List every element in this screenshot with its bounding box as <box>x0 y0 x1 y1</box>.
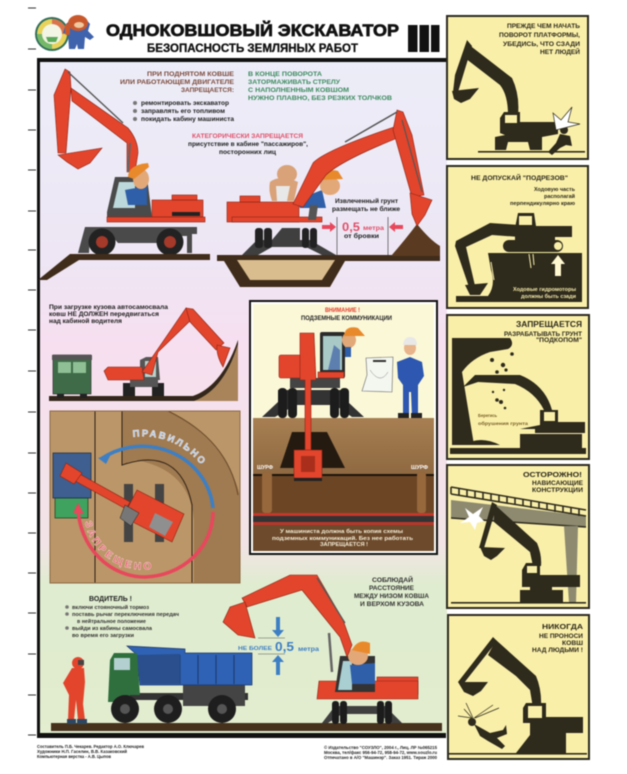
clearance dimension: НЕ БОЛЕЕ <box>238 646 272 652</box>
driver instructions: выйди из кабины самосвала <box>72 625 153 632</box>
green cab <box>108 653 140 702</box>
excavator silhouette <box>449 637 587 755</box>
panel: no undermining <box>447 315 589 459</box>
white note: Ходовые гидромоторы <box>513 287 576 293</box>
cab with driver <box>107 163 152 217</box>
boom stick bucket <box>293 110 432 226</box>
panel: check behind before rotating <box>447 16 588 159</box>
caption <box>272 528 413 548</box>
caution note <box>478 413 528 427</box>
excavator silhouette <box>450 375 586 454</box>
title: ОДНОКОВШОВЫЙ ЭКСКАВАТОР <box>106 21 399 40</box>
driver instructions: ВОДИТЕЛЬ ! <box>89 596 132 603</box>
caption: ЗАПРЕЩАЕТСЯ ! <box>320 542 368 548</box>
wheels <box>111 695 139 723</box>
credits right: © Издательство "СОУЗЛО", 2004 г., Лиц. ЛР №065215 <box>324 745 438 750</box>
heading: ОСТОРОЖНО! <box>523 470 582 479</box>
text: braking advice <box>248 71 392 102</box>
caution note: Берегись <box>478 413 497 419</box>
text: passengers forbidden: КАТЕГОРИЧЕСКИ ЗАПРЕЩАЕТСЯ <box>192 133 303 140</box>
excavator top left <box>38 69 210 280</box>
undercarriage <box>242 228 336 255</box>
binding ticks <box>28 8 36 735</box>
warning text: УБЕДИСЬ, ЧТО СЗАДИ <box>503 42 580 48</box>
excavator silhouette <box>451 502 586 604</box>
text: raised bucket warning <box>120 71 235 94</box>
soil distance callout: метра <box>363 226 385 232</box>
warning text: ПРЕЖДЕ ЧЕМ НАЧАТЬ <box>507 24 581 30</box>
truck front <box>52 355 92 398</box>
text: braking advice: В КОНЦЕ ПОВОРОТА <box>248 71 322 78</box>
text: passengers forbidden: посторонних лиц <box>219 149 276 156</box>
dump truck <box>108 646 252 723</box>
distance note: И ВЕРХОМ КУЗОВА <box>360 601 424 608</box>
panel: no undercut <box>447 166 588 308</box>
impact rays <box>458 703 499 718</box>
track motor marker <box>554 242 562 250</box>
ground <box>38 254 210 280</box>
bullet list: forbidden actions: покидать кабину машиниста <box>141 116 235 123</box>
impact star <box>553 107 580 130</box>
distance note: СОБЛЮДАЙ <box>372 575 413 584</box>
blue arrow <box>98 446 213 508</box>
driver instructions: поставь рычаг переключения передач <box>72 612 179 618</box>
bullet list: forbidden actions <box>133 100 235 123</box>
excavator silhouette <box>452 40 585 153</box>
excavator from above <box>60 463 184 542</box>
panel: overhead structures <box>447 465 589 608</box>
body <box>107 195 205 222</box>
heading: КОНСТРУКЦИИ <box>532 488 583 494</box>
scene: loading truck from slope <box>49 308 238 401</box>
excavator top right in pit <box>217 110 440 287</box>
bridge <box>451 487 586 603</box>
soil pile <box>391 224 440 256</box>
heading <box>532 622 584 654</box>
excavator <box>104 308 230 396</box>
blueprint <box>362 357 393 392</box>
clearance dimension <box>238 617 320 675</box>
pit <box>217 255 440 287</box>
white note <box>513 287 576 300</box>
credits left: Художники Н.П. Гаселин, В.В. Казаковский <box>37 749 127 754</box>
dark curved bank <box>122 411 240 583</box>
warning text: НЕТ ЛЮДЕЙ <box>540 48 580 56</box>
credits right <box>324 745 438 760</box>
subtitle: БЕЗОПАСНОСТЬ ЗЕМЛЯНЫХ РАБОТ <box>147 43 358 55</box>
plan view: correct and forbidden rotation <box>48 410 242 584</box>
bullet list: forbidden actions: ремонтировать экскаватор <box>141 100 229 107</box>
heading <box>523 470 583 494</box>
undercarriage <box>322 701 402 724</box>
distance note <box>354 575 429 608</box>
mascot <box>63 15 94 49</box>
bullet list: forbidden actions: заправлять его топливом <box>141 108 225 115</box>
header logo <box>35 17 69 51</box>
note: располагай <box>544 193 575 200</box>
heading: НИКОГДА <box>542 622 584 631</box>
boom stick bucket <box>223 575 352 672</box>
credits left <box>37 744 144 759</box>
heading: НАД ЛЮДЬМИ ! <box>532 648 583 654</box>
warning text <box>499 24 581 56</box>
heading: РАЗРАБАТЫВАТЬ ГРУНТ <box>504 332 582 338</box>
roman numeral III <box>408 25 440 52</box>
text: braking advice: ЗАТОРМАЖИВАТЬ СТРЕЛУ <box>248 79 341 86</box>
ground strip <box>51 723 442 731</box>
soil cracks <box>491 254 534 280</box>
excavation <box>280 432 345 468</box>
label ПРАВИЛЬНО: ПРАВИЛЬНО <box>132 428 206 464</box>
heading: НАВИСАЮЩИЕ <box>532 481 583 487</box>
shurf labels <box>257 465 429 471</box>
shurf labels: ШУРФ <box>411 465 429 471</box>
red arrow <box>73 503 213 577</box>
label ЗАПРЕЩЕНО: ЗАПРЕЩЕНО <box>84 520 152 570</box>
road lines <box>95 411 192 583</box>
undercarriage <box>78 227 197 256</box>
heading: НЕ ДОПУСКАЙ "ПОДРЕЗОВ" <box>471 174 568 182</box>
passenger <box>269 165 298 201</box>
white arrow <box>551 255 565 276</box>
engineer <box>397 337 424 418</box>
panel: underground utilities <box>249 300 438 555</box>
text: loading note: ковш НЕ ДОЛЖЕН передвигаться <box>49 311 159 318</box>
text: braking advice: НУЖНО ПЛАВНО, БЕЗ РЕЗКИХ ТОЛЧКОВ <box>248 95 392 102</box>
clearance dimension: метра <box>298 647 320 653</box>
driver instructions: в нейтральное положение <box>77 618 147 625</box>
heading <box>504 320 582 344</box>
driver instructions: во время его загрузки <box>72 633 134 639</box>
distance note: РАССТОЯНИЕ <box>369 585 415 592</box>
soil distance callout: размещать не ближе <box>332 206 401 213</box>
note: Ходовую часть <box>534 187 575 193</box>
boom and stick <box>54 69 138 172</box>
chassis <box>115 693 248 700</box>
soil distance callout: от бровки <box>344 233 379 240</box>
credits right: Отпечатано в А/О "Машинэр". Заказ 1951. Тираж 2000 <box>324 755 438 760</box>
text: passengers forbidden <box>188 133 308 156</box>
credits right: Москва, тел/факс 956-94-72, 958-94-72, www.souzlo.ru <box>324 750 437 755</box>
text: raised bucket warning: ПРИ ПОДНЯТОМ КОВШЕ <box>147 71 235 78</box>
struck person <box>548 126 572 155</box>
text: raised bucket warning: ИЛИ РАБОТАЮЩЕМ ДВИГАТЕЛЕ <box>120 79 235 86</box>
caption: У машиниста должна быть копия схемы <box>280 528 404 535</box>
text: raised bucket warning: ЗАПРЕЩАЕТСЯ: <box>181 87 234 94</box>
cab and driver <box>335 642 375 692</box>
body <box>317 677 418 699</box>
soil distance callout: 0,5 <box>342 220 360 234</box>
clearance dimension: 0,5 <box>275 639 294 654</box>
shurf labels: ШУРФ <box>257 465 274 471</box>
panel: never over people <box>448 615 589 759</box>
distance note: МЕЖДУ НИЗОМ КОВША <box>354 593 429 600</box>
truck from above <box>53 453 91 518</box>
caption: подземных коммуникаций. Без нее работать <box>272 535 413 542</box>
rock block <box>456 253 582 302</box>
text: passengers forbidden: присутствие в кабине "пассажиров", <box>188 140 308 148</box>
credits left: Составитель П.Б. Чекарев. Редактор А.О. Ключарев <box>37 744 144 749</box>
underground layers <box>253 472 434 551</box>
text: loading note: над кабиной водителя <box>49 318 122 325</box>
note: перпендикулярно краю <box>510 201 576 207</box>
main panel <box>37 58 447 738</box>
heading: ЗАПРЕЩАЕТСЯ <box>516 320 582 329</box>
slope ground <box>49 340 238 401</box>
heading: КОВШ <box>562 641 583 647</box>
heading: НЕ ПРОНОСИ <box>539 634 583 640</box>
caution note: обрушения грунта <box>478 420 528 427</box>
driver instructions: включи стояночный тормоз <box>72 604 149 611</box>
text: braking advice: С НАПОЛНЕННЫМ КОВШОМ <box>248 87 350 94</box>
warning text: ПОВОРОТ ПЛАТФОРМЫ, <box>499 33 580 39</box>
body <box>227 196 322 222</box>
credits left: Компьютерная верстка - А.В. Цыпов <box>37 754 111 759</box>
excavator silhouette <box>455 213 572 295</box>
text: loading note: При загрузке кузова автосамосвала <box>49 304 169 311</box>
soil distance callout <box>322 198 403 255</box>
heading: "ПОДКОПОМ" <box>536 338 582 344</box>
impact star <box>460 507 484 530</box>
heading: ВНИМАНИЕ ! <box>325 307 360 314</box>
falling soil <box>464 352 514 445</box>
struck person <box>468 718 507 749</box>
subheading: ПОДЗЕМНЫЕ КОММУНИКАЦИИ <box>301 315 393 322</box>
white note: должны быть сзади <box>521 293 576 300</box>
excavator bottom right <box>223 575 418 724</box>
excavator front view <box>262 327 365 481</box>
note <box>510 187 576 207</box>
worker in red suit <box>63 657 87 724</box>
driver instructions <box>65 596 179 639</box>
ground line <box>49 340 238 401</box>
rock overhang <box>452 338 512 445</box>
driver <box>296 170 343 208</box>
blue body <box>127 646 252 685</box>
text: loading note <box>49 304 169 325</box>
soil distance callout: Извлеченный грунт <box>335 198 398 205</box>
